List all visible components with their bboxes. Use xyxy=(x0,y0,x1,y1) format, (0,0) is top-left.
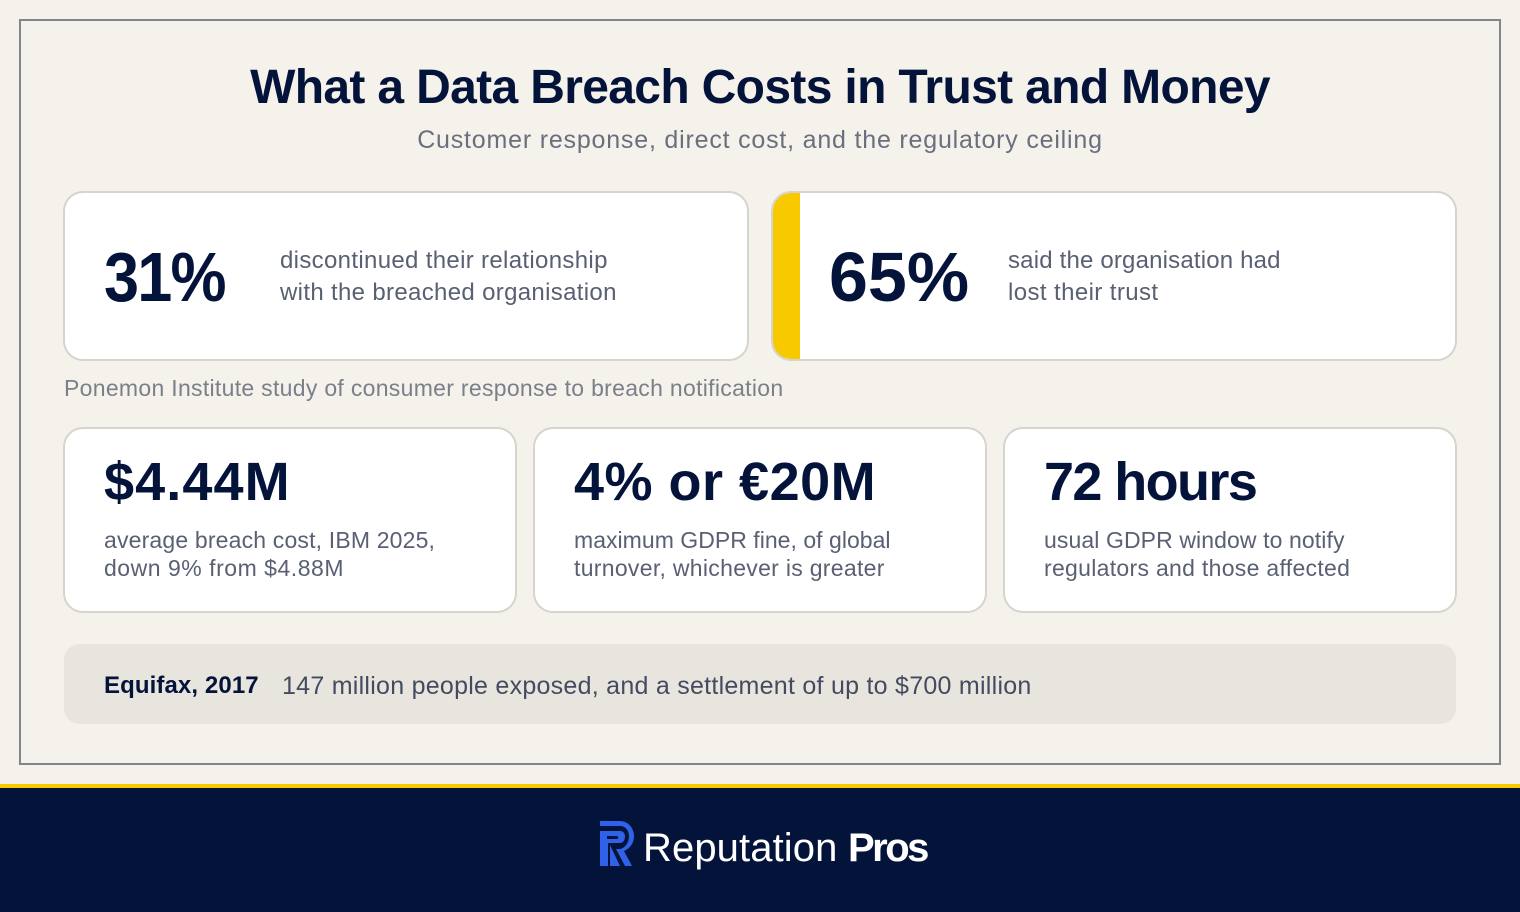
description: discontinued: with the breached organisation xyxy=(280,279,617,306)
stat: 65%: 65% xyxy=(829,238,969,316)
logo wordmark: Pros: Pros xyxy=(848,826,927,870)
description: lost trust: lost their trust xyxy=(1008,279,1158,306)
logo wordmark: Reputation: Reputation xyxy=(643,826,837,870)
description: discontinued: discontinued their relationship xyxy=(280,247,608,274)
panel: GDPR fine xyxy=(533,427,987,613)
icon: R logo mark xyxy=(600,821,634,866)
panel: notification window xyxy=(1003,427,1457,613)
description: GDPR window: usual GDPR window to notify xyxy=(1044,527,1345,553)
stat: 31%: 31% xyxy=(104,238,225,316)
callout label: Equifax, 2017 xyxy=(104,672,259,699)
title: What a Data Breach Costs in Trust and Money xyxy=(250,61,1270,114)
description: maximum GDPR fine xyxy=(574,527,891,581)
description: lost trust: said the organisation had xyxy=(1008,247,1281,274)
source note: Ponemon Institute study of consumer response to breach notification xyxy=(64,375,783,401)
description: discontinued xyxy=(280,247,617,306)
footer band xyxy=(0,784,1520,912)
description: GDPR window: regulators and those affected xyxy=(1044,555,1350,581)
stat: $4.44M: $4.44M xyxy=(104,452,291,512)
footer logo xyxy=(600,821,928,870)
stat: 72 hours: 72 hours xyxy=(1044,452,1256,512)
description: average breach cost: average breach cost, IBM 2025, xyxy=(104,527,435,553)
description: lost trust xyxy=(1008,247,1281,306)
callout text: 147 million people exposed, and a settlement of up to $700 million xyxy=(282,672,1032,700)
description: average breach cost: down 9% from $4.88M xyxy=(104,555,344,581)
outer frame xyxy=(19,19,1501,765)
subtitle: Customer response, direct cost, and the regulatory ceiling xyxy=(417,126,1103,154)
stat: 4% or €20M: 4% or €20M xyxy=(574,452,876,512)
description: average breach cost xyxy=(104,527,435,581)
accent bar xyxy=(771,191,800,361)
panel: 65% stat xyxy=(771,191,1457,361)
callout: Equifax xyxy=(64,644,1456,724)
description: GDPR window xyxy=(1044,527,1350,581)
panel: 31% stat xyxy=(63,191,749,361)
panel: average breach cost xyxy=(63,427,517,613)
description: maximum GDPR fine: maximum GDPR fine, of global xyxy=(574,527,891,553)
description: maximum GDPR fine: turnover, whichever is greater xyxy=(574,555,885,581)
